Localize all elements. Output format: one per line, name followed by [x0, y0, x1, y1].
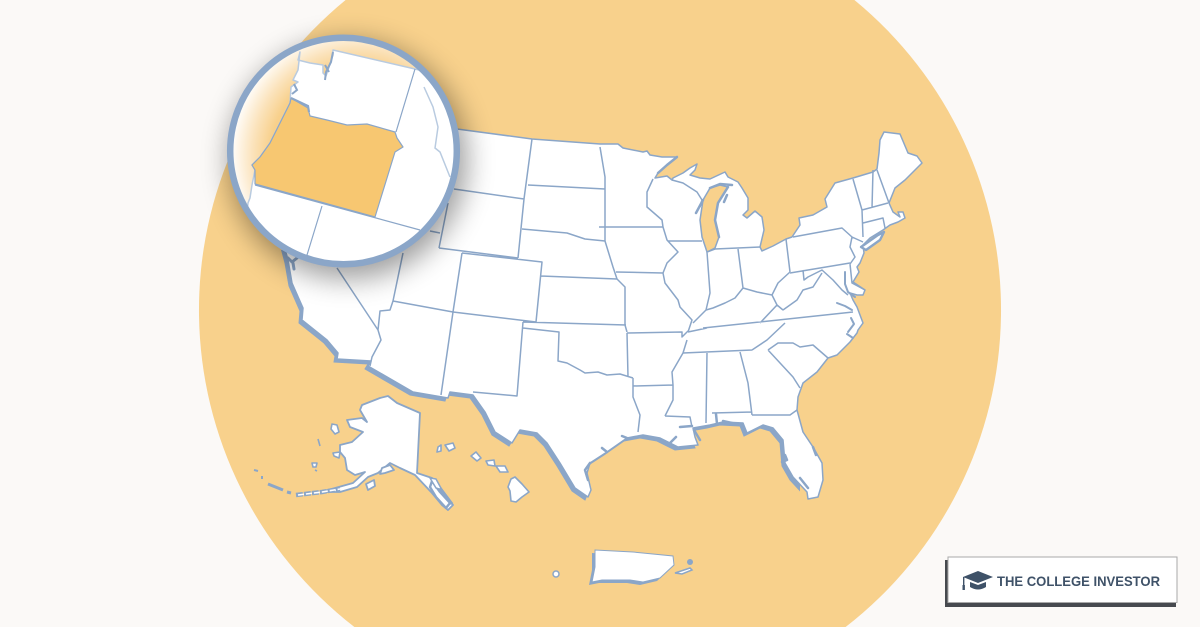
long island	[861, 232, 884, 250]
aleutian chain	[296, 489, 340, 495]
bays and sounds	[288, 157, 855, 488]
magnifier	[230, 38, 480, 275]
logo wordmark: THE COLLEGE INVESTOR	[997, 573, 1160, 589]
icon: graduation cap	[962, 571, 993, 590]
background circle	[199, 0, 1001, 627]
map: Alaska	[254, 396, 453, 510]
inset borders	[255, 69, 420, 255]
map: Puerto Rico	[553, 550, 693, 585]
lake michigan	[700, 185, 728, 252]
alaska panhandle islands	[430, 481, 450, 508]
magnifier shadow	[229, 41, 467, 279]
logo badge	[945, 557, 1177, 607]
map: Hawaii	[437, 443, 529, 502]
state: Oregon	[252, 98, 403, 217]
inset land	[247, 49, 454, 261]
magnifier ring	[230, 38, 457, 264]
columbia river	[291, 98, 309, 112]
kodiak and gulf islands	[366, 480, 375, 490]
puget sound	[292, 52, 333, 94]
map: contiguous United States	[277, 125, 922, 502]
